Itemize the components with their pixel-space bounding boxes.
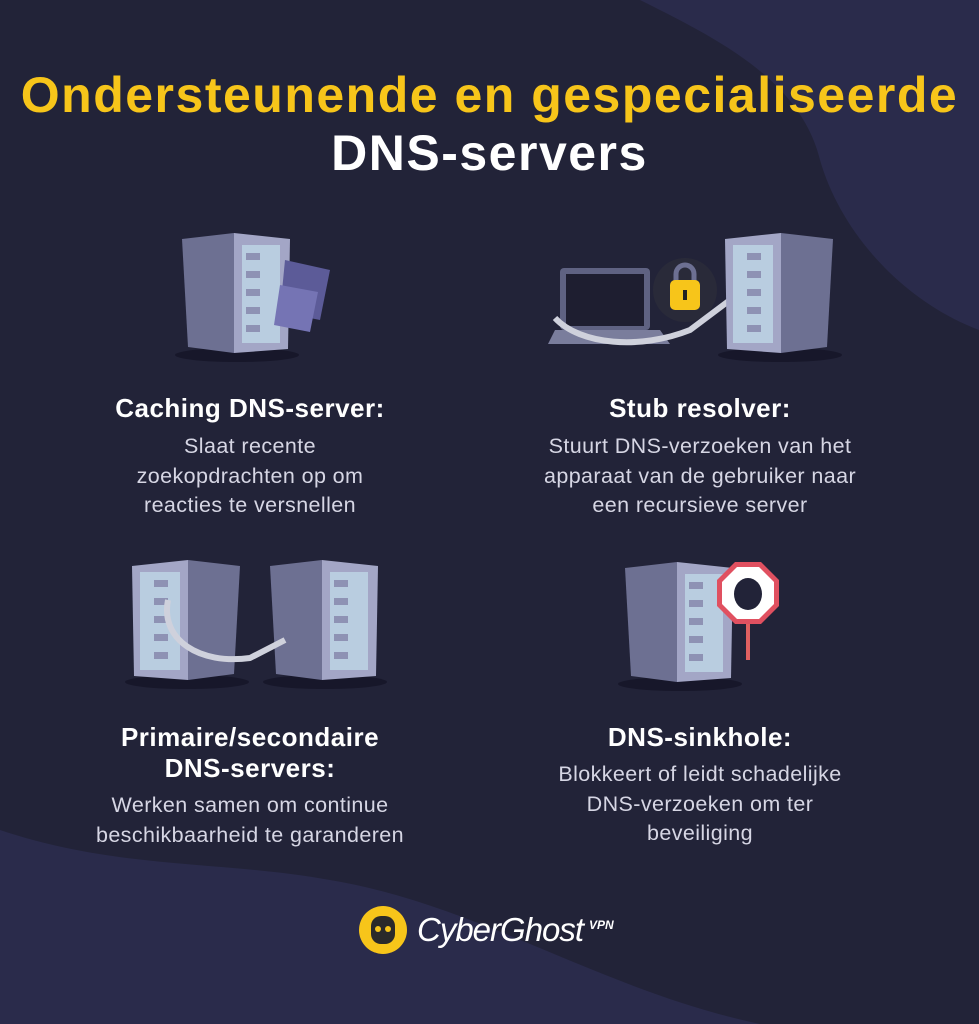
panel: primary/secondary: Werken samen om continue (112, 793, 388, 817)
panel: sinkhole: Blokkeert of leidt schadelijke (558, 762, 842, 786)
logo: VPN (589, 918, 614, 932)
panel: stub resolver (544, 393, 856, 517)
icon: stub resolver laptop lock (548, 233, 842, 362)
title: DNS-servers (331, 125, 648, 181)
panel: stub resolver: apparaat van de gebruiker naar (544, 464, 856, 488)
panel: caching: zoekopdrachten op om (137, 464, 363, 488)
panel: caching: Slaat recente (184, 434, 316, 458)
panel: sinkhole: beveiliging (647, 821, 753, 845)
panel: sinkhole: DNS-sinkhole: (608, 722, 792, 752)
icon: primary/secondary servers (125, 560, 387, 689)
title: Ondersteunende en gespecialiseerde (21, 67, 958, 123)
panel: caching: reacties te versnellen (144, 493, 356, 517)
title (21, 67, 958, 181)
panel: caching (115, 393, 385, 517)
panel: primary/secondary (96, 722, 404, 846)
logo: CyberGhost (417, 911, 583, 948)
panel: primary/secondary: DNS-servers: (165, 753, 335, 783)
panel: stub resolver: Stuurt DNS-verzoeken van het (549, 434, 851, 458)
panel: sinkhole: DNS-verzoeken om ter (587, 792, 813, 816)
icon: sinkhole server with stop sign (618, 562, 779, 691)
panel: stub resolver: een recursieve server (592, 493, 808, 517)
logo (359, 906, 614, 954)
panel: stub resolver: Stub resolver: (609, 393, 791, 423)
panel: primary/secondary: Primaire/secondaire (121, 722, 379, 752)
panel: caching: Caching DNS-server: (115, 393, 385, 423)
icon: caching server with folders (175, 233, 330, 362)
panel: primary/secondary: beschikbaarheid te garanderen (96, 822, 404, 846)
panel: sinkhole (558, 722, 842, 845)
